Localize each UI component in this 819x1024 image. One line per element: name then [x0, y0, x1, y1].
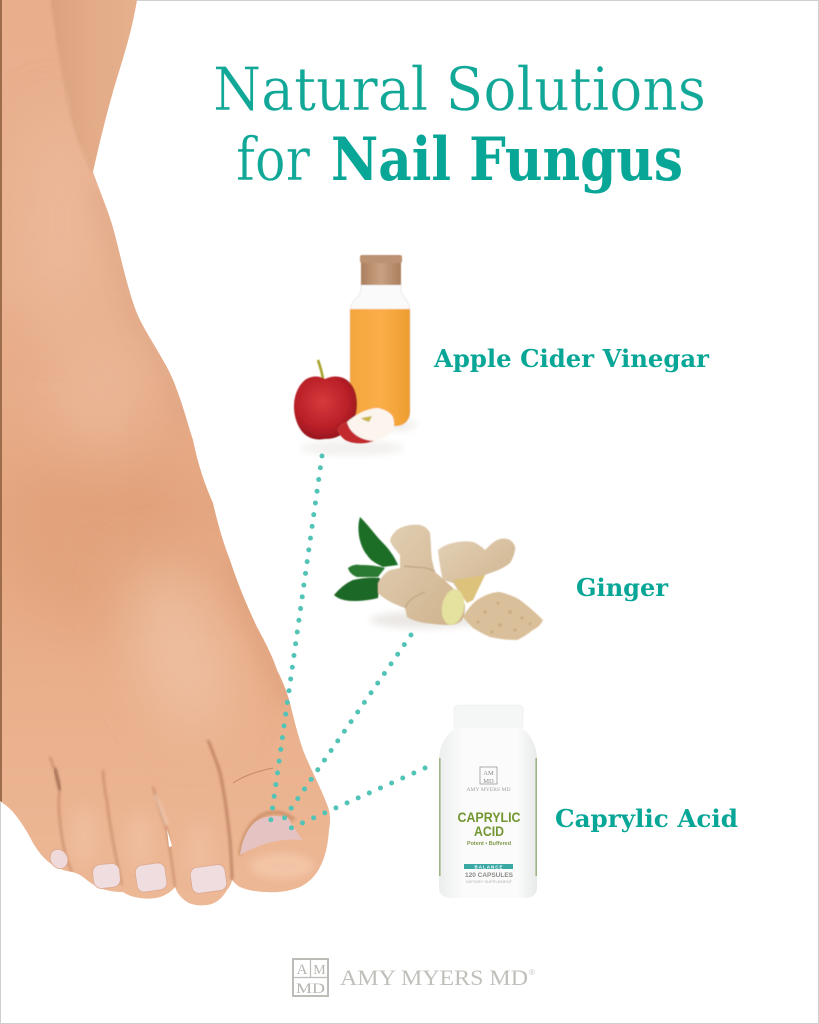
item: caprylic acid bottle [439, 705, 537, 898]
item: caprylic acid bottle: AMY MYERS MD [466, 788, 511, 793]
item: caprylic acid bottle: MD [483, 778, 494, 785]
title: Natural Solutions [213, 55, 706, 125]
leaves [358, 517, 398, 567]
big toenail [240, 816, 303, 855]
item: caprylic acid bottle: BALANCE [474, 864, 504, 870]
nail bed shadow of big toe [240, 812, 294, 855]
main root [378, 525, 465, 625]
title [213, 55, 706, 195]
toe highlights [77, 816, 91, 852]
toenails [189, 864, 228, 894]
item: caprylic acid bottle: CAPRYLIC [458, 810, 521, 825]
label: caprylic acid: Caprylic Acid [555, 804, 738, 833]
logo: Amy Myers MD [293, 959, 535, 997]
label: apple cider vinegar: Apple Cider Vinegar [433, 344, 710, 373]
logo: Amy Myers MD: A [297, 962, 308, 978]
illustration: foot [0, 0, 330, 905]
logo: Amy Myers MD: ® [529, 968, 535, 977]
item: caprylic acid bottle: ACID [474, 824, 504, 839]
title: Nail Fungus [331, 125, 683, 195]
dotted connector lines [270, 456, 425, 828]
apple slice [338, 408, 394, 443]
item: caprylic acid bottle: Potent • Buffered [467, 841, 511, 847]
item: caprylic acid bottle: 120 CAPSULES [465, 872, 514, 879]
item: caprylic acid bottle: DIETARY SUPPLEMENT [466, 880, 513, 884]
arrow: ginger to nail [283, 635, 411, 820]
toe gaps [50, 757, 72, 872]
logo: Amy Myers MD: M [313, 963, 326, 978]
bottle [350, 284, 410, 426]
toe crease [233, 768, 273, 783]
powder [463, 592, 543, 640]
item: ginger image [334, 517, 543, 640]
leg crease [52, 0, 93, 172]
logo: Amy Myers MD: MD [296, 981, 325, 997]
arrow: vinegar to nail [270, 456, 322, 826]
gap white sliver [167, 829, 172, 847]
logo: Amy Myers MD: AMY MYERS MD [340, 965, 528, 990]
main foot silhouette [0, 0, 330, 905]
apple [318, 360, 323, 379]
second leg behind [48, 0, 137, 172]
label: ginger: Ginger [576, 573, 669, 602]
title: for [236, 125, 310, 195]
arrow: caprylic acid to nail [291, 768, 425, 828]
item: apple cider vinegar image [294, 255, 417, 455]
left dark image edge [0, 0, 2, 802]
item: caprylic acid bottle: AM [483, 770, 494, 777]
second root [438, 538, 515, 603]
